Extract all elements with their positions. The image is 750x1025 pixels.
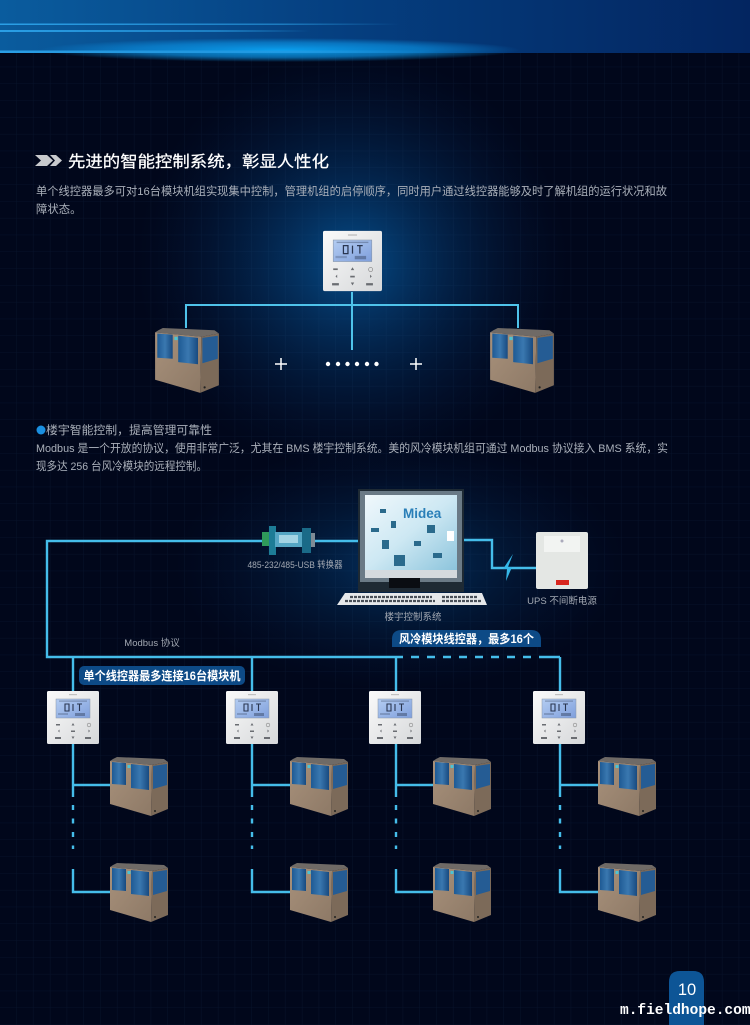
converter bbox=[262, 526, 315, 555]
controller bbox=[323, 231, 382, 291]
intro paragraph: 单个线控器最多可对16台模块机组实现集中控制，管理机组的启停顺序，同时用户通过线控器能够及时了解机组的运行状况和故 bbox=[36, 184, 668, 198]
intro paragraph: 障状态。 bbox=[36, 202, 82, 216]
keyboard bbox=[337, 593, 487, 605]
UPS bbox=[536, 532, 588, 589]
device labels: 485-232/485-USB 转换器 bbox=[248, 559, 343, 571]
device labels: Modbus 协议 bbox=[124, 637, 180, 649]
BMS paragraph bbox=[36, 423, 668, 473]
connector lines bbox=[186, 292, 518, 350]
units row bottom bbox=[110, 863, 656, 922]
icon: double chevron bbox=[35, 155, 62, 166]
plus and dots bbox=[275, 358, 422, 370]
unit left bbox=[155, 328, 219, 393]
device labels: UPS 不间断电源 bbox=[527, 595, 597, 607]
bullet bbox=[36, 426, 46, 434]
intro paragraph bbox=[36, 184, 668, 216]
header band bbox=[0, 0, 750, 62]
monitor bbox=[358, 489, 464, 592]
screen logo: Midea bbox=[403, 506, 442, 521]
BMS paragraph: Modbus 是一个开放的协议，使用非常广泛，尤其在 BMS 楼宇控制系统。美的风冷模块机组可通过 Modbus 协议接入 BMS 系统，实 bbox=[36, 441, 668, 455]
diagram: single controller to units bbox=[155, 231, 554, 393]
page number tab bbox=[669, 971, 704, 1025]
network lines bbox=[47, 540, 598, 892]
controllers row bbox=[47, 691, 585, 744]
callout: max 16 controllers: 风冷模块线控器，最多16个 bbox=[399, 631, 534, 646]
section title: 先进的智能控制系统，彰显人性化 bbox=[68, 152, 329, 171]
device labels bbox=[124, 559, 597, 649]
BMS paragraph: 楼宇智能控制，提高管理可靠性 bbox=[46, 423, 212, 437]
BMS paragraph: 现多达 256 台风冷模块的远程控制。 bbox=[36, 459, 207, 473]
page number tab: 10 bbox=[678, 981, 696, 999]
callout: 16 units per controller bbox=[79, 666, 245, 685]
computer bbox=[337, 489, 487, 605]
watermark: m.fieldhope.com bbox=[620, 1003, 750, 1019]
unit right bbox=[490, 328, 554, 393]
device labels: 楼宇控制系统 bbox=[384, 611, 442, 623]
units row top bbox=[110, 757, 656, 816]
callout: 16 units per controller: 单个线控器最多连接16台模块机 bbox=[84, 668, 240, 683]
icon: lightning bolt bbox=[503, 554, 513, 581]
